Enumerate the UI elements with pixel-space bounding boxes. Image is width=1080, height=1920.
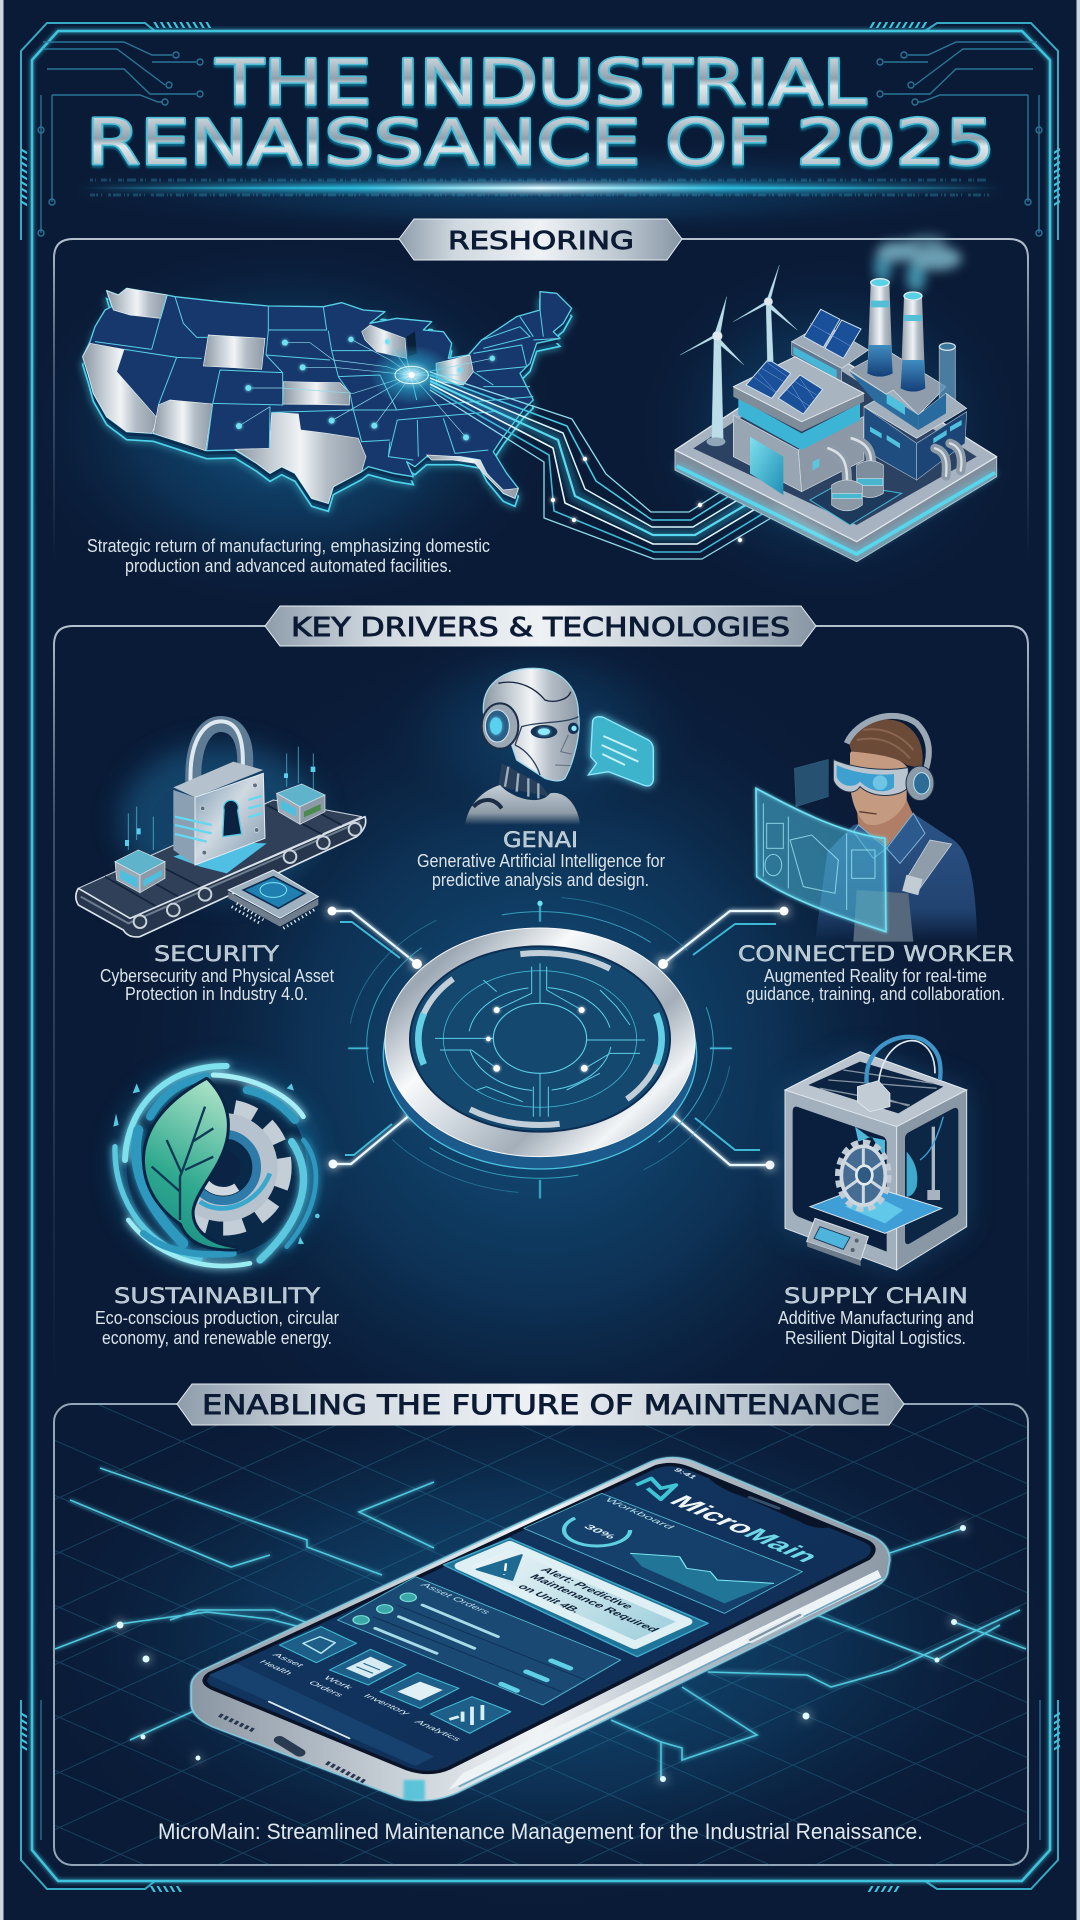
phone screen text: Analytics bbox=[412, 1719, 463, 1742]
caption: MicroMain: Streamlined Maintenance Management for the Industrial Renaissance. bbox=[158, 1819, 923, 1844]
smoke bbox=[874, 235, 962, 293]
phone screen text: 30% bbox=[581, 1523, 620, 1540]
heading: maintenance: ENABLING THE FUTURE OF MAINTENANCE bbox=[202, 1390, 880, 1421]
text: supply chain: Resilient Digital Logistics. bbox=[785, 1328, 966, 1348]
title: THE INDUSTRIAL bbox=[215, 46, 867, 119]
text: security: Protection in Industry 4.0. bbox=[125, 984, 308, 1004]
icon: sustainability leaf and gear bbox=[95, 1066, 339, 1348]
text: genai: Generative Artificial Intelligence for bbox=[417, 851, 665, 871]
title: RENAISSANCE OF 2025 bbox=[86, 106, 995, 179]
phone screen text: Asset Orders bbox=[418, 1582, 493, 1615]
phone screen text: Maintenance Required bbox=[527, 1573, 663, 1633]
phone screen text: 9:41 bbox=[671, 1467, 700, 1480]
text: sustainability: economy, and renewable energy. bbox=[102, 1328, 332, 1348]
text: connected worker bbox=[738, 942, 1014, 1004]
phone screen text: Work bbox=[321, 1675, 355, 1691]
text: reshoring description: production and advanced automated facilities. bbox=[125, 556, 452, 576]
factory bbox=[675, 235, 997, 562]
worker art bbox=[756, 716, 977, 942]
security art bbox=[76, 721, 366, 937]
central circuit ring bbox=[348, 897, 732, 1198]
text: security bbox=[100, 942, 334, 1004]
text: genai: predictive analysis and design. bbox=[432, 870, 649, 890]
heading: key drivers: KEY DRIVERS & TECHNOLOGIES bbox=[291, 613, 790, 643]
phone screen text: Workboard bbox=[602, 1497, 676, 1530]
text: connected worker: CONNECTED WORKER bbox=[738, 942, 1014, 966]
heading: maintenance bbox=[177, 1384, 904, 1425]
text: supply chain: Additive Manufacturing and bbox=[778, 1308, 974, 1328]
text: genai: GENAI bbox=[503, 828, 578, 852]
circuit grid floor bbox=[54, 1404, 1028, 1865]
phone screen text: Alert: Predictive bbox=[538, 1566, 638, 1610]
text: sustainability: Eco-conscious production, circular bbox=[95, 1308, 339, 1328]
phone screen text: MicroMain bbox=[663, 1492, 827, 1565]
map of USA bbox=[83, 288, 572, 511]
icon: padlock on conveyor bbox=[76, 721, 366, 1004]
central hub connectors bbox=[328, 906, 788, 1170]
heading: reshoring bbox=[399, 219, 682, 260]
text: sustainability bbox=[95, 1284, 339, 1348]
upper block bbox=[792, 342, 842, 382]
circuit traces map to factory bbox=[430, 372, 771, 559]
phone body bbox=[191, 1457, 890, 1800]
right building bbox=[864, 407, 917, 480]
pipes and tanks bbox=[828, 438, 961, 487]
leaf gear art bbox=[113, 1066, 320, 1267]
phone screen text bbox=[257, 1467, 827, 1742]
text: reshoring description bbox=[87, 536, 490, 576]
text: reshoring description: Strategic return of manufacturing, emphasizing domestic bbox=[87, 536, 490, 556]
heading: key drivers bbox=[265, 606, 816, 646]
main building bbox=[733, 415, 802, 492]
icon: genai robot bbox=[417, 668, 665, 890]
text: supply chain: SUPPLY CHAIN bbox=[784, 1284, 968, 1308]
robot art bbox=[465, 668, 653, 825]
phone screen text: Asset bbox=[270, 1652, 305, 1668]
text: supply chain bbox=[778, 1284, 974, 1348]
icon: 3d printer bbox=[778, 1037, 974, 1348]
text: genai bbox=[417, 828, 665, 890]
wind turbines bbox=[680, 265, 797, 446]
text: connected worker: Augmented Reality for real-time bbox=[764, 966, 987, 986]
icon: connected worker bbox=[738, 716, 1014, 1004]
text: security: Cybersecurity and Physical Asset bbox=[100, 966, 334, 986]
phone screen text: Health bbox=[257, 1659, 294, 1676]
text: connected worker: guidance, training, and collaboration. bbox=[746, 984, 1005, 1004]
phone bbox=[191, 1457, 890, 1800]
panel: reshoring bbox=[54, 219, 1028, 576]
text: security: SECURITY bbox=[154, 942, 279, 966]
text: sustainability: SUSTAINABILITY bbox=[114, 1284, 320, 1308]
panel: maintenance bbox=[54, 1384, 1028, 1865]
chimneys bbox=[849, 279, 955, 415]
phone screen text: Inventory bbox=[361, 1693, 413, 1716]
title bbox=[86, 46, 995, 179]
title data band bbox=[80, 180, 1000, 195]
printer art bbox=[785, 1037, 967, 1272]
panel: key drivers bbox=[54, 606, 1028, 1380]
heading: reshoring: RESHORING bbox=[448, 226, 634, 255]
phone screen text: Orders bbox=[306, 1680, 345, 1698]
phone screen text: on Unit 4B. bbox=[515, 1583, 585, 1614]
